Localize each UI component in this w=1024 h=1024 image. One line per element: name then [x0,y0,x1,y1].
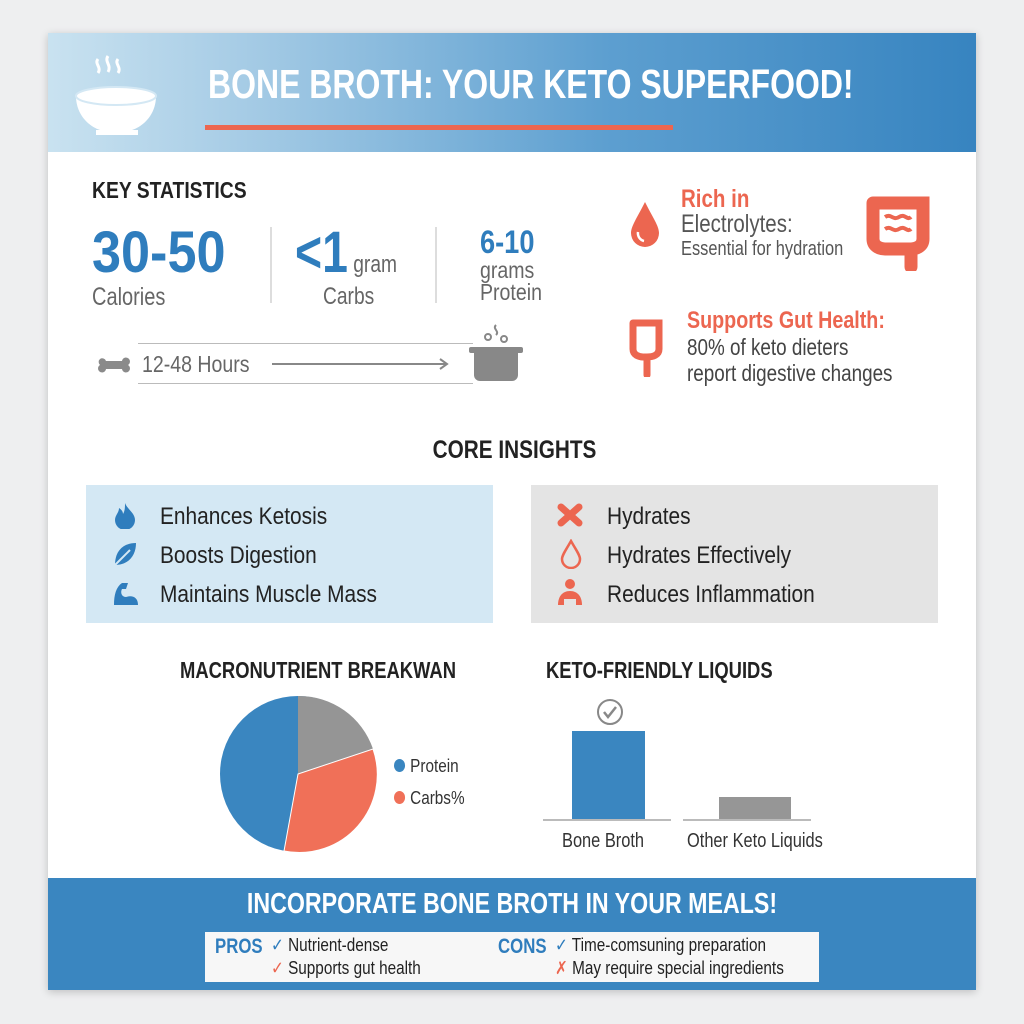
panel: gut health: 80% of keto dieters [687,334,848,360]
stat: protein: Protein [480,279,542,305]
pros cons box: CONS [498,935,547,958]
panel: insights left: Boosts Digestion [160,542,317,569]
icon: flame [115,503,135,529]
pros cons box: ✓ Supports gut health [271,958,421,978]
icon: bone cross [558,504,582,526]
timeline: cooking time: 12-48 Hours [142,351,250,377]
panel: insights right: Hydrates Effectively [607,542,791,569]
panel: electrolytes: Electrolytes: [681,210,793,238]
panel: insights left [86,485,493,623]
header banner [48,33,976,152]
panel: insights right [531,485,938,623]
chart: bar: Other Keto Liquids [687,830,823,852]
icon: muscle [114,583,138,605]
title: BONE BROTH: YOUR KETO SUPERFOOD! [208,61,854,107]
footer banner [48,878,976,990]
icon: leaf [115,543,136,565]
legend [394,756,465,808]
heading: KEY STATISTICS [92,177,247,203]
pros cons box: ✓ Time-comsuning preparation [555,935,766,955]
legend: Protein [410,756,459,776]
icon: soup bowl [75,55,157,135]
icon: drop [631,202,659,247]
panel: electrolytes [631,185,930,271]
pros cons box [205,932,819,982]
footer title: INCORPORATE BONE BROTH IN YOUR MEALS! [247,888,777,920]
chart: pie [220,696,377,852]
stat: calories: 30-50 [92,220,226,285]
pros cons box: ✓ Nutrient-dense [271,935,388,955]
chart: bar [543,699,823,852]
stat: carbs: Carbs [323,283,374,310]
icon: intestine [866,196,930,271]
panel: insights left: Enhances Ketosis [160,503,327,530]
timeline: cooking time [98,324,523,384]
panel: insights left: Maintains Muscle Mass [160,581,377,608]
icon: person [558,579,582,605]
pros cons box: PROS [215,935,263,958]
panel: insights right: Hydrates [607,503,691,530]
icon: pot [469,324,523,381]
heading: core insights: CORE INSIGHTS [433,436,596,464]
panel: electrolytes: Essential for hydration [681,238,843,260]
chart: bar: Bone Broth [562,830,644,852]
stat: protein: grams [480,257,534,283]
stat: protein [480,224,542,305]
icon: gut [630,320,662,377]
panel: gut health: report digestive changes [687,360,892,386]
panel: gut health [630,307,892,386]
icon: drop outline [560,539,582,569]
pros cons box: ✗ May require special ingredients [555,958,784,978]
panel: key statistics [92,177,542,384]
stat: carbs: <1 gram [295,220,397,285]
panel: electrolytes: Rich in [681,185,749,213]
heading: macronutrient: MACRONUTRIENT BREAKWAN [180,657,456,683]
panel: insights right: Reduces Inflammation [607,581,815,608]
legend: Carbs% [410,788,465,808]
stat: protein: 6-10 [480,224,534,260]
panel: gut health: Supports Gut Health: [687,307,885,334]
heading: keto liquids: KETO-FRIENDLY LIQUIDS [546,657,773,683]
stat: calories: Calories [92,283,165,311]
